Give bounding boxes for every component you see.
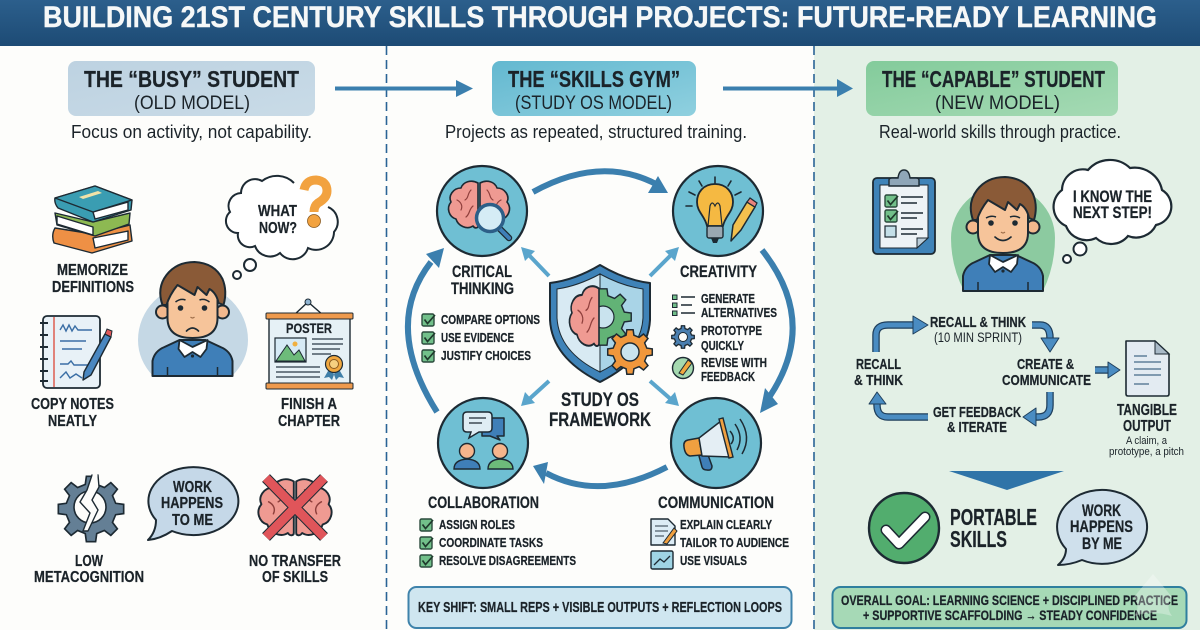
speech bubble: work happens by me: BY ME [1082, 534, 1122, 553]
arrow: old model to skills gym [335, 80, 473, 97]
icon: poster: POSTER [286, 320, 332, 336]
label: study os framework: FRAMEWORK [549, 410, 651, 431]
skill node: critical thinking [422, 166, 540, 363]
speech bubble: work happens by me: WORK [1082, 501, 1122, 520]
icon: broken gear [58, 473, 124, 542]
icon: tangible output document [1126, 341, 1169, 396]
step: recall and think sprint: (10 MIN SPRINT) [934, 329, 1022, 345]
skill node: creativity [672, 166, 777, 384]
panel: the capable student (new model) [832, 61, 1186, 628]
subtitle: projects as training: Projects as repeated, structured training. [445, 122, 747, 142]
icon: question mark [304, 180, 327, 228]
step: recall and think: & THINK [854, 372, 903, 389]
label: study os framework: STUDY OS [561, 390, 639, 411]
framework arrows [521, 247, 679, 406]
subtitle: real-world skills: Real-world skills through practice. [879, 122, 1121, 142]
icon: notebook and pen [40, 316, 112, 388]
icon: study os shield [550, 265, 652, 382]
list: creativity methods: REVISE WITH [701, 356, 767, 370]
cycle arrows [408, 171, 793, 486]
thought bubble: i know the next step [1054, 160, 1171, 263]
subtitle: focus on activity: Focus on activity, not capability. [71, 122, 312, 142]
caption: no transfer of skills: NO TRANSFER [249, 553, 341, 570]
icon: green check [869, 493, 939, 563]
list: creativity methods: FEEDBACK [701, 370, 755, 384]
speech bubble: work happens to me: TO ME [172, 512, 213, 529]
panel: the skills gym (study os model) [408, 61, 793, 628]
step: get feedback and iterate: GET FEEDBACK [933, 404, 1021, 421]
student: confident [951, 177, 1055, 291]
checklist: collaboration: COORDINATE TASKS [439, 536, 543, 550]
arrow: skills gym to capable student [723, 79, 853, 97]
step: create and communicate: CREATE & [1017, 356, 1074, 373]
heading: critical thinking [451, 262, 514, 298]
icon: light bulb and pencil [673, 166, 763, 256]
caption: tangible output: A claim, a [1126, 435, 1168, 447]
speech bubble: work happens to me: WORK [173, 479, 212, 496]
thought bubble: what now?: WHAT [258, 203, 297, 220]
speech bubble: work happens by me: HAPPENS [1070, 517, 1133, 536]
thought bubble: what now? [226, 176, 338, 279]
caption: low metacognition [34, 553, 144, 586]
step: recall and think sprint [930, 314, 1026, 345]
step: recall and think [854, 356, 903, 389]
flow arrows [869, 316, 1120, 426]
heading: busy student [68, 61, 315, 116]
heading: skills gym [492, 61, 696, 116]
step: recall and think sprint: RECALL & THINK [930, 314, 1026, 331]
step: create and communicate: COMMUNICATE [1002, 372, 1091, 389]
thought bubble: what now?: NOW? [259, 220, 297, 237]
list: creativity methods: ALTERNATIVES [701, 306, 777, 320]
step: create and communicate [1002, 356, 1091, 389]
label: portable skills: PORTABLE [950, 504, 1037, 530]
callout: key shift: KEY SHIFT: SMALL REPS + VISIBLE OUTPUTS + REFLECTION LOOPS [418, 599, 782, 616]
caption: tangible output [1109, 402, 1184, 458]
thought bubble: i know the next step: NEXT STEP! [1073, 203, 1152, 222]
heading: skills gym: THE “SKILLS GYM” [508, 66, 680, 92]
caption: no transfer of skills [249, 553, 341, 586]
caption: finish a chapter: CHAPTER [278, 413, 340, 430]
caption: no transfer of skills: OF SKILLS [262, 569, 328, 586]
icon: brain and magnifier [437, 166, 527, 256]
checklist: critical thinking: COMPARE OPTIONS [441, 313, 540, 327]
student: worried [138, 262, 248, 376]
title banner [0, 0, 1200, 46]
caption: low metacognition: LOW [75, 553, 104, 570]
arrow: downward triangle [949, 471, 1064, 490]
skill node: collaboration [420, 398, 576, 568]
caption: memorize definitions: DEFINITIONS [52, 279, 134, 296]
label: portable skills: SKILLS [950, 526, 1007, 552]
callout: overall goal [832, 587, 1186, 628]
speech bubble: work happens to me [148, 467, 238, 540]
thought bubble: i know the next step: I KNOW THE [1073, 187, 1152, 206]
icon: stack of books [53, 186, 132, 253]
list: communication methods: EXPLAIN CLEARLY [680, 518, 773, 532]
checklist: collaboration: RESOLVE DISAGREEMENTS [439, 554, 576, 568]
panel: the busy student (old model) [31, 61, 353, 586]
heading: capable student [866, 61, 1118, 116]
speech bubble: work happens to me: HAPPENS [161, 495, 223, 512]
caption: memorize definitions: MEMORIZE [57, 262, 128, 279]
caption: copy notes neatly [31, 396, 114, 430]
checklist: collaboration [420, 518, 576, 568]
checklist: critical thinking: USE EVIDENCE [441, 331, 514, 345]
list: creativity methods: PROTOTYPE [701, 324, 762, 338]
callout: key shift [408, 587, 792, 628]
heading: critical thinking: THINKING [451, 279, 514, 298]
icon: two people talking [438, 398, 528, 488]
caption: memorize definitions [52, 262, 134, 296]
list: communication methods: TAILOR TO AUDIENCE [680, 536, 789, 550]
step: get feedback and iterate: & ITERATE [947, 419, 1007, 436]
checklist: collaboration: ASSIGN ROLES [439, 518, 515, 532]
heading: critical thinking: CRITICAL [452, 262, 512, 281]
list: creativity methods: QUICKLY [701, 339, 745, 353]
caption: finish a chapter [278, 396, 340, 430]
skill node: communication [651, 398, 789, 569]
heading: collaboration: COLLABORATION [428, 493, 539, 512]
heading: creativity: CREATIVITY [680, 262, 758, 281]
speech bubble: work happens by me [1057, 490, 1147, 565]
heading: busy student: THE “BUSY” STUDENT [84, 66, 299, 92]
caption: finish a chapter: FINISH A [281, 396, 337, 413]
icon: clipboard checklist [873, 170, 935, 254]
heading: busy student: (OLD MODEL) [134, 93, 250, 114]
caption: tangible output: prototype, a pitch [1109, 446, 1184, 458]
list: communication methods [651, 518, 789, 569]
heading: communication: COMMUNICATION [658, 493, 774, 512]
checklist: critical thinking [422, 313, 540, 363]
heading: capable student: (NEW MODEL) [935, 93, 1060, 114]
caption: tangible output: OUTPUT [1123, 418, 1171, 435]
caption: tangible output: TANGIBLE [1117, 402, 1177, 419]
list: creativity methods [672, 292, 777, 384]
icon: poster [266, 299, 353, 389]
icon: brain crossed out [258, 478, 332, 537]
heading: capable student: THE “CAPABLE” STUDENT [882, 66, 1105, 92]
caption: copy notes neatly: COPY NOTES [31, 396, 114, 413]
panel background: new model [814, 46, 1200, 630]
step: get feedback and iterate [933, 404, 1021, 436]
list: communication methods: USE VISUALS [680, 554, 747, 568]
caption: copy notes neatly: NEATLY [48, 413, 97, 430]
caption: low metacognition: METACOGNITION [34, 569, 144, 586]
label: portable skills [950, 504, 1037, 552]
checklist: critical thinking: JUSTIFY CHOICES [441, 349, 531, 363]
step: recall and think: RECALL [856, 356, 901, 373]
flow loop: sprint cycle [854, 314, 1120, 436]
label: study os framework [549, 390, 651, 431]
list: creativity methods: GENERATE [701, 292, 755, 306]
heading: skills gym: (STUDY OS MODEL) [515, 93, 672, 114]
icon: megaphone [671, 398, 761, 488]
